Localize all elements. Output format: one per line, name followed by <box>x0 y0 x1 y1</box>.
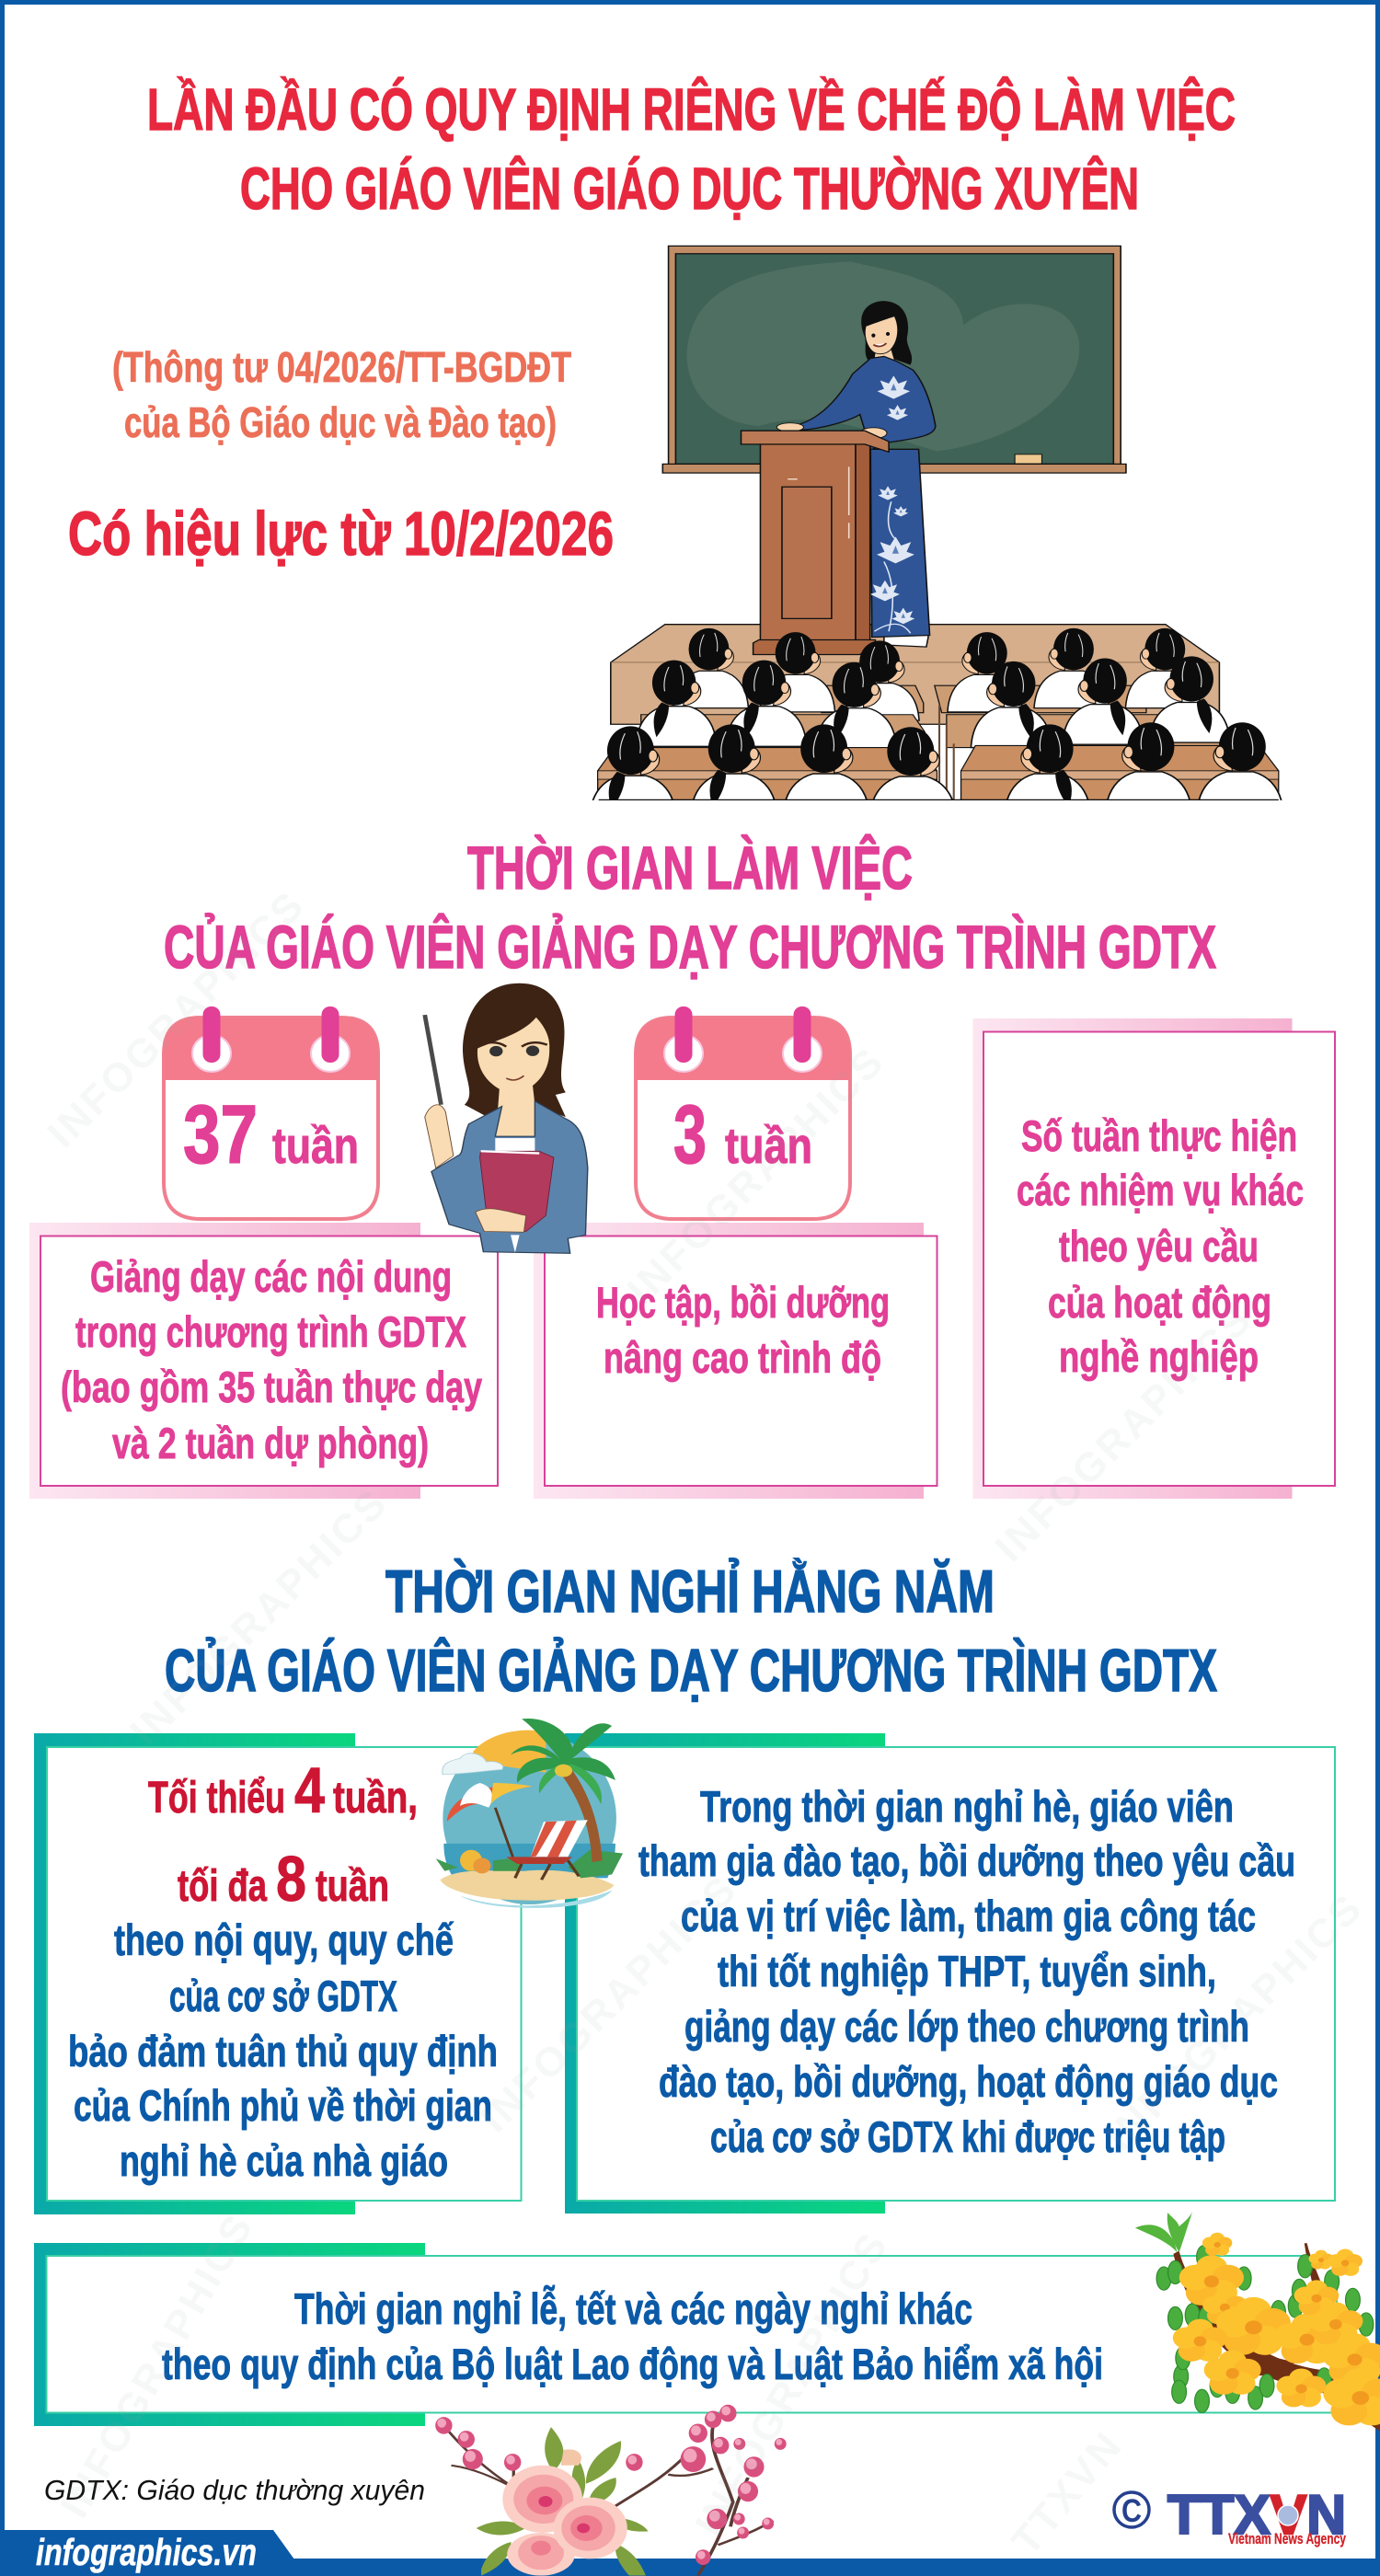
watermarks: INFOGRAPHICS <box>986 1295 1261 1570</box>
watermarks: INFOGRAPHICS <box>121 1479 397 1754</box>
illustration: teacher with pointer and book <box>425 983 588 1253</box>
panel: public holidays: Thời gian nghỉ lễ, tết và các ngày nghỉ khác <box>294 2284 972 2333</box>
panel: training <box>534 1223 937 1499</box>
copyright mark <box>1114 2492 1149 2529</box>
classroom platform <box>611 625 1219 724</box>
students and desks <box>592 627 1282 800</box>
panel: other duties: theo yêu cầu <box>1059 1222 1259 1271</box>
red duration text: 4 <box>294 1754 325 1826</box>
panel: public holidays: theo quy định của Bộ luật Lao động và Luật Bảo hiểm xã hội <box>162 2340 1103 2388</box>
logo: TTXVN <box>1114 2484 1346 2547</box>
blue description text: theo nội quy, quy chế <box>114 1915 454 1964</box>
heading: annual leave: THỜI GIAN NGHỈ HẰNG NĂM <box>385 1558 995 1625</box>
red duration text <box>148 1754 418 1915</box>
red duration text: 8 <box>276 1843 306 1915</box>
panel: teaching content: trong chương trình GDTX <box>75 1307 466 1356</box>
calendar: 3 weeks <box>636 1006 850 1219</box>
panel: public holidays <box>34 2243 1337 2426</box>
panel: minimum and maximum leave <box>34 1733 521 2214</box>
calendar: 37 weeks: 37 <box>183 1089 258 1181</box>
icon: blackboard <box>662 246 1126 473</box>
red duration text: tối đa <box>178 1862 267 1911</box>
illustration: apricot blossom branch <box>1135 2212 1380 2432</box>
copyright mark: C <box>1121 2493 1142 2529</box>
illustration: beach island <box>436 1719 623 1908</box>
red duration text: Tối thiểu <box>148 1774 285 1823</box>
legal reference subtitle: (Thông tư 04/2026/TT-BGDĐT <box>112 343 571 391</box>
panel: other duties: của hoạt động <box>1048 1278 1271 1327</box>
watermarks: INFOGRAPHICS <box>1097 1884 1372 2159</box>
calendar: 3 weeks: 3 <box>673 1089 707 1181</box>
watermarks <box>39 881 1372 2563</box>
watermarks: INFOGRAPHICS <box>618 1038 893 1313</box>
TTXVN wordmark: TTXVN <box>1167 2484 1346 2546</box>
panel: teaching content: và 2 tuần dự phòng) <box>112 1419 429 1467</box>
title <box>147 75 1236 222</box>
watermarks: INFOGRAPHICS <box>52 2205 262 2525</box>
watermarks: TTXVN <box>1003 2422 1132 2563</box>
footer tab: website: infographics.vn <box>36 2531 257 2573</box>
blue description text: của Chính phủ về thời gian <box>74 2081 492 2130</box>
panel: summer duties: thi tốt nghiệp THPT, tuyển sinh, <box>718 1947 1216 1995</box>
panel: other duties: Số tuần thực hiện <box>1021 1111 1297 1160</box>
legal reference subtitle: của Bộ Giáo dục và Đào tạo) <box>124 398 557 446</box>
blue description text: bảo đảm tuân thủ quy định <box>68 2027 498 2076</box>
legal reference subtitle <box>112 343 571 446</box>
teacher in ao dai <box>776 301 936 647</box>
calendar: 37 weeks: tuần <box>272 1117 359 1174</box>
panel: teaching content: (bao gồm 35 tuần thực dạy <box>61 1363 482 1411</box>
lectern <box>742 431 889 655</box>
panel: summer duties: Trong thời gian nghỉ hè, giáo viên <box>700 1782 1234 1831</box>
watermarks: INFOGRAPHICS <box>39 881 314 1156</box>
blue description text <box>68 1915 498 2185</box>
red duration text: tuần, <box>333 1774 418 1823</box>
calendar: 37 weeks <box>164 1006 378 1219</box>
panel: other duties: nghề nghiệp <box>1059 1332 1259 1381</box>
footnote: GDTX: Giáo dục thường xuyên <box>44 2474 425 2506</box>
panel: summer duties <box>565 1733 1335 2214</box>
illustration: teacher in classroom <box>590 246 1283 820</box>
blue description text: nghỉ hè của nhà giáo <box>120 2136 448 2185</box>
effective date: Có hiệu lực từ 10/2/2026 <box>68 500 614 569</box>
panel: other duties <box>973 1018 1335 1499</box>
blue description text: của cơ sở GDTX <box>169 1972 397 2020</box>
heading: annual leave <box>165 1558 1217 1704</box>
illustration: peach blossom branch <box>435 2405 787 2576</box>
heading: working time <box>164 834 1216 981</box>
heading: working time: THỜI GIAN LÀM VIỆC <box>467 834 913 902</box>
panel: training: Học tập, bồi dưỡng <box>596 1278 890 1327</box>
panel: training: nâng cao trình độ <box>604 1333 881 1382</box>
panel: teaching content: Giảng dạy các nội dung <box>90 1252 452 1301</box>
panel: teaching content <box>29 1223 498 1499</box>
calendar: 3 weeks: tuần <box>725 1117 812 1174</box>
red duration text: tuần <box>316 1862 389 1911</box>
watermarks: INFOGRAPHICS <box>471 1866 746 2141</box>
watermarks: INFOGRAPHICS <box>686 2224 897 2544</box>
